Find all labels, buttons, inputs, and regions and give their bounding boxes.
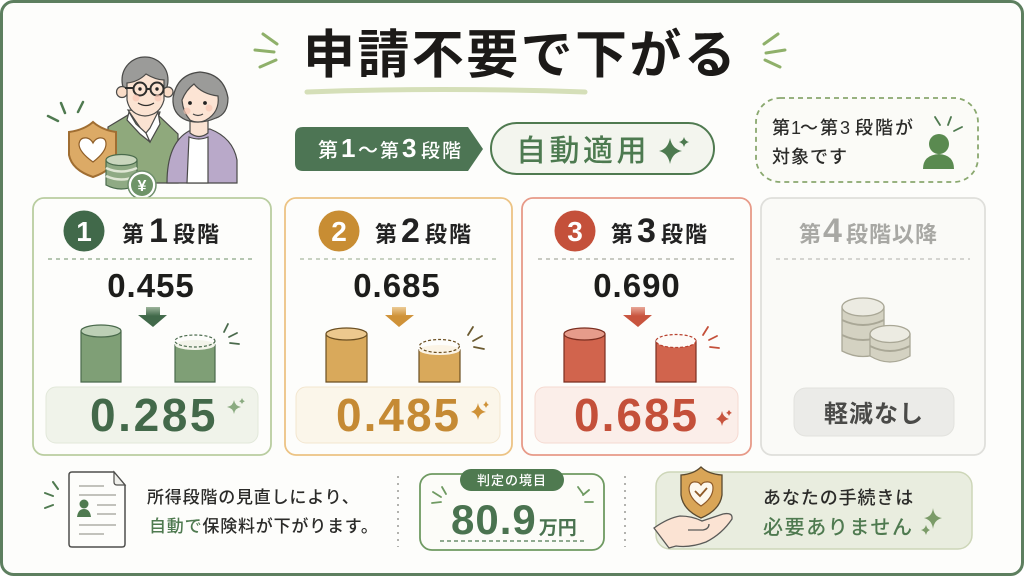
yen coin: ¥ [138,178,147,195]
panel: grade 3 [522,198,751,455]
badge 2: 2 [331,216,347,247]
result [535,387,738,443]
icon: shield with check [681,467,722,518]
tag: target grades: 第 [318,139,338,162]
callout: threshold [420,469,604,550]
cylinder before [326,328,367,382]
panel: grade 2 [285,198,512,455]
tag: target grades: 第 [380,140,399,162]
pill: automatic application [491,123,714,174]
badge 2 [318,210,360,252]
text: your procedure: あなたの手続きは [763,488,914,508]
callout: target note: 第 [772,118,790,138]
tag: target grades: 〜 [358,140,378,162]
panel: grade 1 [33,198,271,455]
callout: target note [756,98,978,182]
shield with heart [69,122,116,177]
icon: person [923,117,962,169]
cylinder after [419,327,484,382]
badge 1: 1 [76,216,92,247]
tag: target grades [295,127,483,171]
cylinder before [81,325,121,382]
heading: grade 4: 第4段階以降 [799,212,938,250]
coin stack [106,154,137,189]
tag: target grades: 1 [341,133,355,163]
tag: target grades: 段階 [421,140,463,162]
cylinder before [564,328,605,382]
callout: target note: 1 [791,118,801,138]
arrow [385,307,414,327]
callout: no procedure needed [654,467,972,549]
callout: target note: 3 [840,118,850,138]
result: 0.685 [574,389,699,441]
badge 3 [554,210,596,252]
tag: target grades: 3 [402,133,416,163]
result: 0.485 [336,389,461,441]
original rate: 0.455 [107,267,195,304]
panel: grade 4 and above [761,198,985,455]
arrow [138,307,167,327]
pill: automatic application: 自動適用 [516,135,650,168]
rays [48,102,83,121]
threshold label [460,469,564,491]
cylinder after [656,327,719,382]
illustration: senior couple with shield and coins [48,57,237,199]
badge 3: 3 [567,216,583,247]
result [46,387,258,443]
icon: document [45,472,125,547]
threshold label: 判定の境目 [477,473,547,488]
arrow [623,307,652,327]
result: 0.285 [90,389,218,441]
woman [167,72,237,183]
result [296,387,500,443]
callout: target note: 対象です [772,147,848,167]
heading: grade 3: 第3段階 [611,212,709,250]
man face [125,82,164,106]
man [108,57,178,183]
sparkle [921,508,942,535]
icon: hand [654,514,732,548]
status button: 軽減なし [824,401,924,428]
cylinder after [175,324,239,382]
original rate: 0.685 [353,267,441,304]
yen coin [128,171,156,199]
callout: target note: 〜 [800,118,818,138]
badge 1 [64,210,104,252]
text: not required: 必要ありません [763,516,914,539]
callout: target note: 第 [820,118,838,138]
icon: coin stacks [842,298,910,362]
title: 申請不要で下がる [303,27,738,85]
status button [794,388,954,436]
text: explanation: 自動で保険料が下がります。 [149,516,379,536]
threshold value: 80.9万円 [451,496,577,543]
heading: grade 1: 第1段階 [122,212,221,250]
text: explanation [147,488,379,536]
original rate: 0.690 [593,267,681,304]
heading: grade 2: 第2段階 [375,212,473,250]
text: explanation: 所得段階の見直しにより、 [147,488,360,507]
callout: target note: 段階が [855,117,915,138]
